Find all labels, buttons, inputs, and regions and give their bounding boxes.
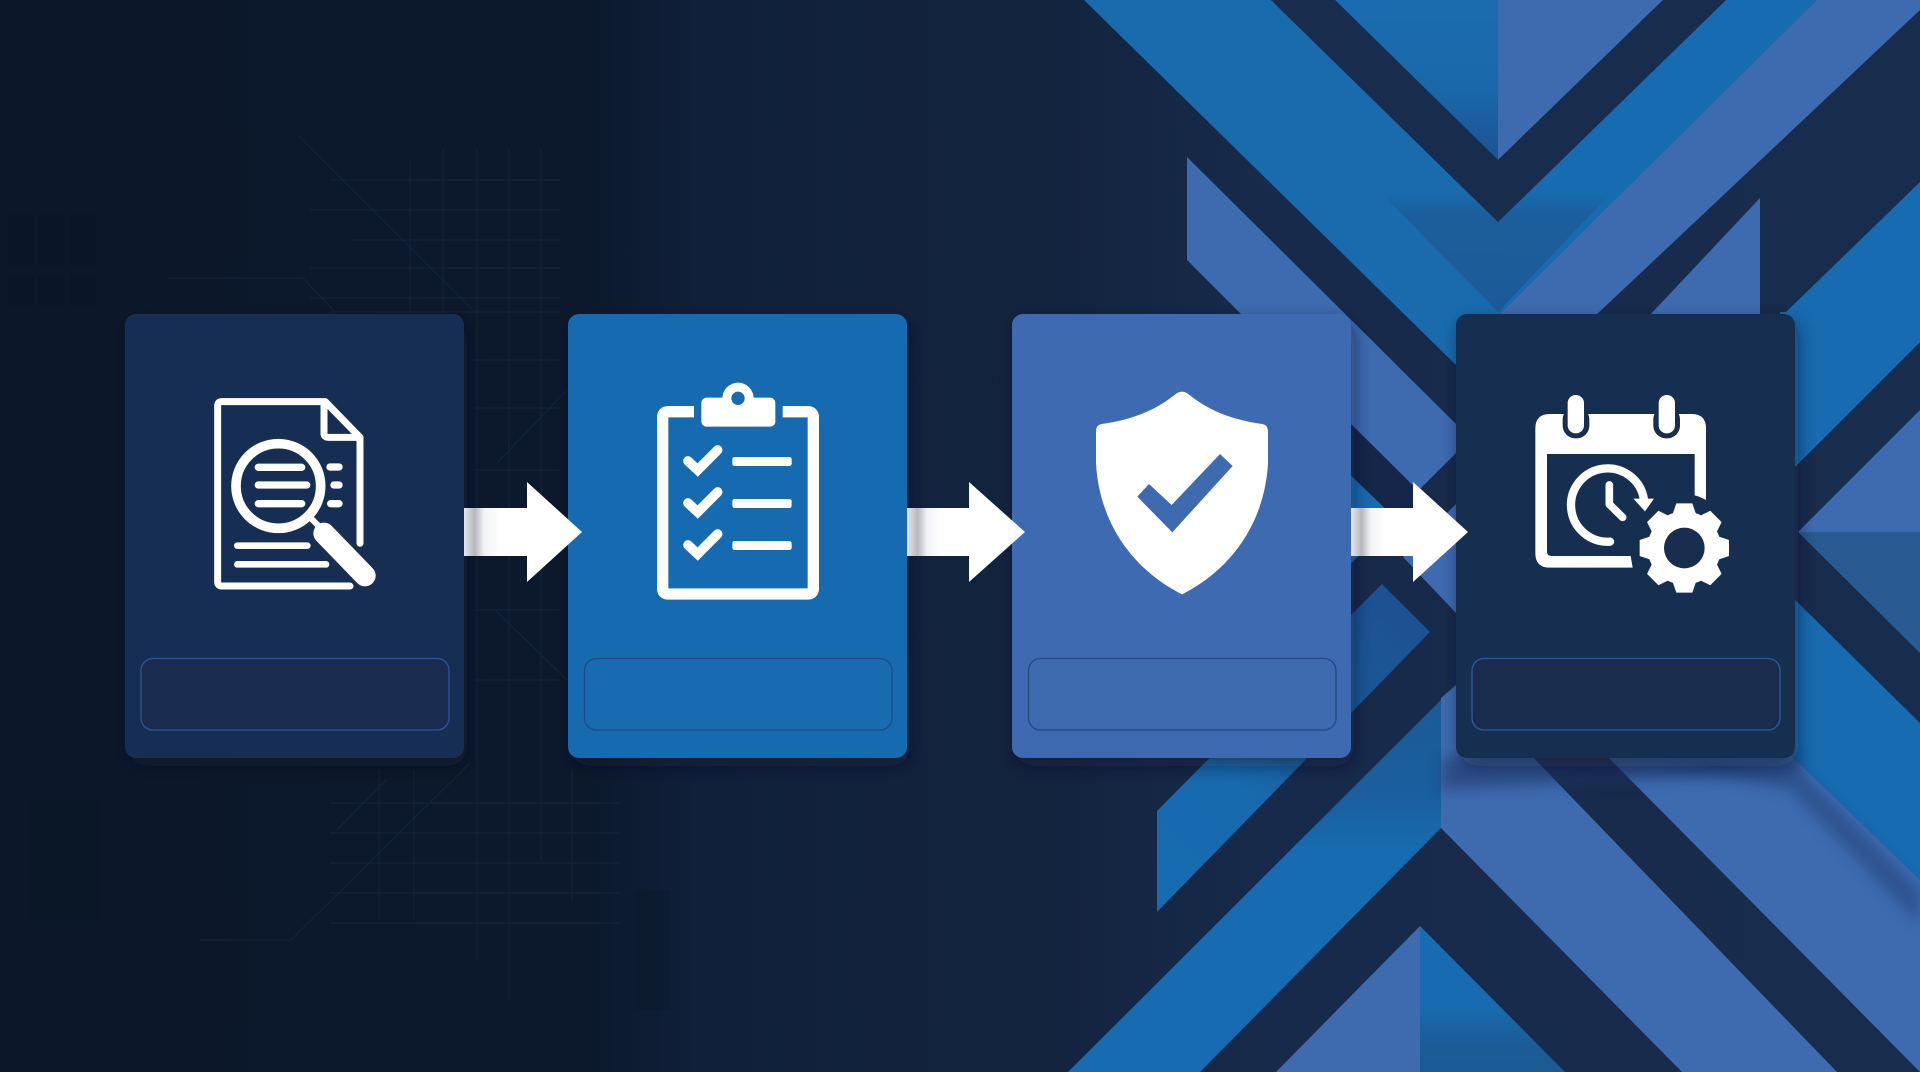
diamond behind card three	[1157, 584, 1430, 912]
geometric chevron artwork	[1068, 0, 1920, 1072]
blue wedge beside card three	[1340, 465, 1395, 575]
icon: shield with check	[1096, 392, 1268, 594]
icon: document with magnifier	[218, 402, 365, 586]
icon: clipboard checklist	[663, 383, 813, 594]
mid blue under arrow three	[1403, 504, 1456, 613]
mid blue lower right panel	[1601, 750, 1920, 1072]
card 1 label box	[141, 658, 449, 730]
mid blue polygon behind card three	[1187, 157, 1456, 491]
card 3 panel	[1012, 314, 1351, 758]
background circuit grid	[168, 135, 620, 1000]
process card 3	[1012, 314, 1351, 758]
mid blue main lower band	[1441, 685, 1837, 1072]
shadow on lower right panel	[1640, 760, 1920, 925]
top V left half	[1335, 0, 1498, 160]
center shaded diamond	[1380, 192, 1612, 312]
card 4 panel	[1456, 314, 1795, 758]
dim right triangle	[1798, 532, 1920, 653]
mid blue band toward top right	[1498, 0, 1920, 316]
dark band crossing behind arrow three	[1352, 425, 1456, 612]
blue lower right band	[1780, 585, 1920, 885]
process card 1	[125, 314, 464, 758]
card 3 label box	[1028, 658, 1336, 730]
bottom triangle left half	[1276, 926, 1420, 1072]
arrow 1	[464, 482, 582, 582]
arrow 2	[907, 482, 1025, 582]
blue right band	[1780, 182, 1920, 482]
bottom triangle right half	[1420, 926, 1565, 1072]
card 4 label box	[1472, 658, 1780, 730]
small triangle upper right	[1649, 198, 1760, 316]
shadow under card four	[1441, 758, 1800, 790]
card 1 panel	[125, 314, 464, 758]
process card 4	[1456, 314, 1795, 758]
dark V cover	[1271, 0, 1726, 222]
top V right half	[1498, 0, 1663, 160]
top left blue diagonal band	[1084, 0, 1498, 365]
process card 2	[568, 314, 907, 758]
blue band toward top right	[1498, 0, 1830, 330]
background texture: left vertical blotches	[8, 215, 670, 1010]
long blue band bottom	[1068, 685, 1456, 1072]
card 2 panel	[568, 314, 907, 758]
arrow 3	[1351, 482, 1468, 582]
icon: calendar with clock and gear	[1535, 395, 1729, 593]
mid blue right triangle	[1798, 410, 1920, 532]
card 2 label box	[584, 658, 892, 730]
